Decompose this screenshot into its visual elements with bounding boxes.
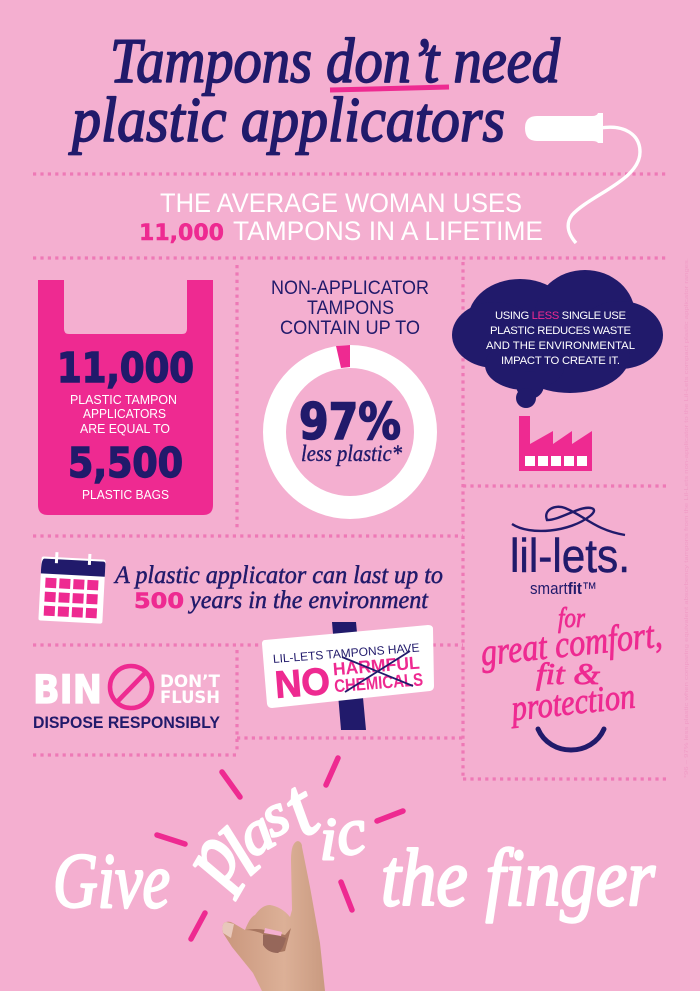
bag text	[57, 344, 194, 502]
cloud shape	[452, 270, 663, 408]
don't flush: DON’T	[160, 672, 220, 692]
tagline: protection	[507, 676, 637, 729]
slogan: t	[266, 761, 335, 854]
ring value: 97%	[299, 393, 401, 451]
ring heading: CONTAIN UP TO	[280, 318, 420, 339]
title	[68, 25, 561, 155]
icon: calendar	[38, 551, 106, 624]
cloud text	[486, 310, 635, 367]
icon: factory	[519, 416, 592, 471]
icon: pink rays	[157, 758, 403, 939]
sign text: HARMFUL	[332, 653, 420, 679]
bag text: 11,000	[57, 344, 194, 392]
tagline: great comfort,	[479, 614, 664, 674]
bag text: APPLICATORS	[83, 407, 166, 421]
don't flush	[160, 672, 220, 708]
don't flush: FLUSH	[160, 688, 220, 708]
panel: plastic bag	[38, 280, 213, 515]
slogan: s	[250, 780, 299, 850]
sign text: CHEMICALS	[333, 669, 424, 696]
sign text: NO	[273, 661, 331, 707]
icon: tampon	[525, 113, 640, 243]
subheading: 11,000	[139, 221, 224, 246]
logo sub-brand: smartfit™	[530, 579, 597, 598]
ring caption: less plastic*	[301, 441, 402, 466]
footnote: *96 – 97% less plastic when comparing equivalent absorbency tampons from the Lil-Lets non-applicator to the Lil-Lets compact plastic applicator ranges.	[684, 257, 690, 778]
subheading: THE AVERAGE WOMAN USES	[160, 188, 522, 218]
icon: prohibited	[110, 666, 152, 708]
tagline: for	[558, 603, 585, 634]
cloud text: PLASTIC REDUCES WASTE	[490, 325, 631, 337]
ring heading: NON-APPLICATOR	[271, 278, 429, 299]
applicator statement: 500	[134, 589, 184, 613]
donut chart	[274, 345, 426, 508]
slogan: l	[203, 814, 275, 891]
panel: bin don't flush	[33, 666, 220, 732]
tagline	[479, 603, 664, 729]
ring heading	[271, 278, 429, 339]
applicator statement: years in the environment	[187, 587, 429, 614]
bag shape	[38, 280, 213, 515]
slogan: the finger	[381, 832, 656, 923]
cloud text: USING LESS SINGLE USE	[495, 310, 626, 322]
slogan: Give	[53, 837, 170, 924]
bag text: 5,500	[68, 439, 183, 487]
sign board	[262, 625, 434, 708]
applicator statement	[113, 562, 443, 614]
bag text: ARE EQUAL TO	[80, 422, 170, 436]
sign text: LIL-LETS TAMPONS HAVE	[272, 641, 420, 666]
slogan: a	[225, 796, 286, 870]
panel: 97 percent less plastic	[271, 278, 429, 508]
sign: no harmful chemicals	[262, 622, 434, 730]
title: plastic applicators	[68, 84, 505, 155]
bag text: PLASTIC BAGS	[82, 488, 169, 502]
cloud text: AND THE ENVIRONMENTAL	[486, 340, 635, 352]
bag text: PLASTIC TAMPON	[70, 393, 177, 407]
dispose responsibly: DISPOSE RESPONSIBLY	[33, 714, 220, 732]
icon: hand	[222, 841, 325, 991]
panel: lil-lets logo	[510, 507, 630, 598]
sign post	[332, 622, 366, 730]
slogan	[53, 761, 656, 924]
strike-through cross	[342, 651, 413, 692]
panel: thought cloud	[452, 270, 663, 408]
bin word: BIN	[33, 668, 102, 713]
logo swirl	[512, 507, 625, 535]
title underline	[330, 87, 449, 90]
slogan: c	[330, 794, 371, 871]
logo wordmark: lil-lets.	[510, 529, 630, 582]
sign text	[272, 640, 424, 707]
icon: smile	[538, 729, 604, 750]
tagline: fit &	[536, 656, 600, 691]
subheading	[139, 188, 543, 246]
title: Tampons don’t need	[110, 25, 561, 96]
slogan: i	[320, 806, 337, 872]
applicator statement: A plastic applicator can last up to	[113, 562, 443, 589]
subheading: TAMPONS IN A LIFETIME	[233, 216, 543, 246]
ring heading: TAMPONS	[307, 298, 394, 319]
slogan: p	[160, 818, 259, 901]
cloud text: IMPACT TO CREATE IT.	[501, 355, 620, 367]
